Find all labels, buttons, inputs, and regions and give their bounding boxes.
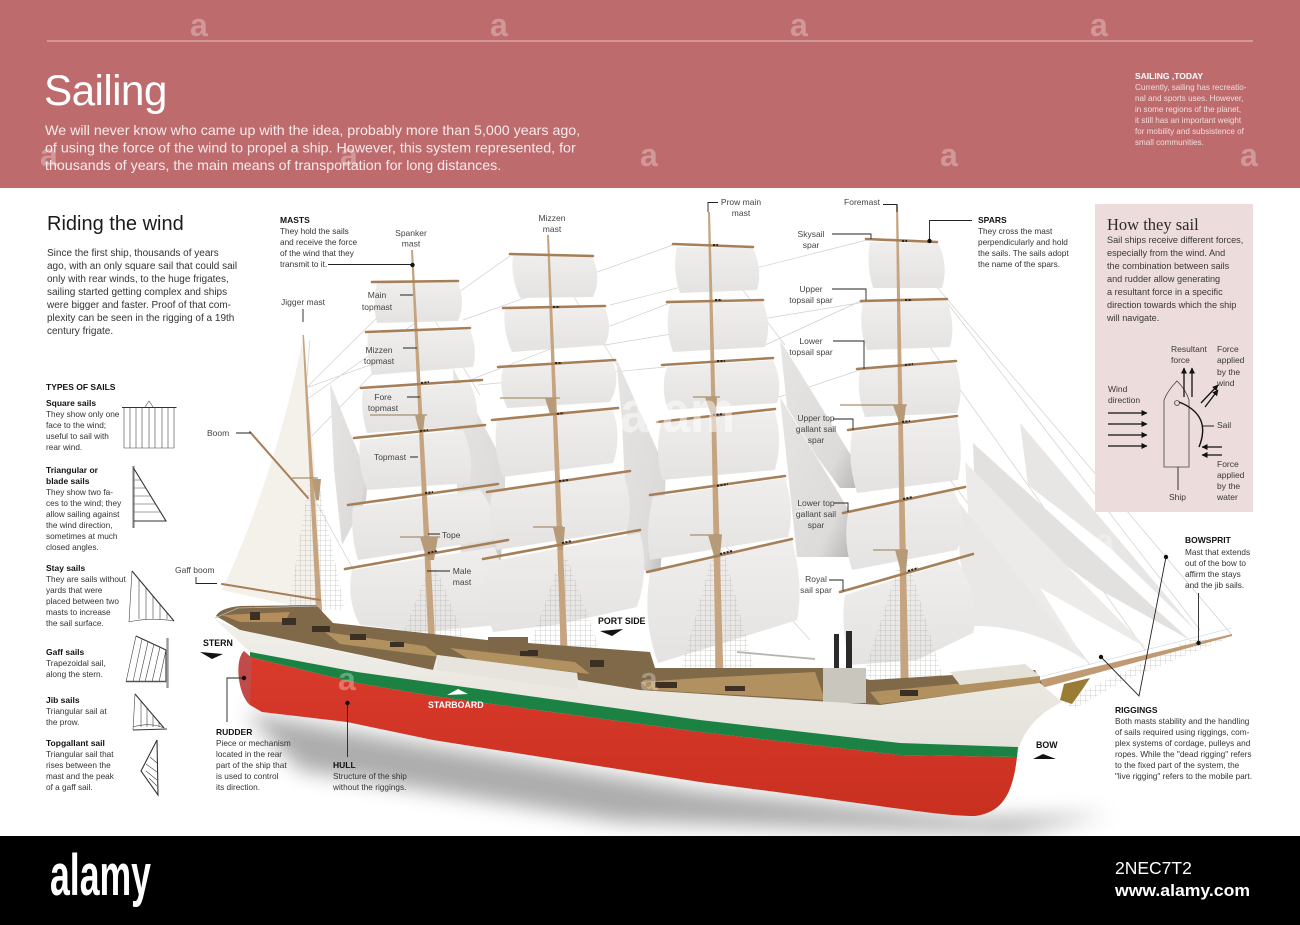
gaff sails [46, 636, 168, 688]
square sails: rear wind. [46, 443, 82, 452]
callout: riggings: RIGGINGS [1115, 705, 1158, 715]
triangular sails: blade sails [46, 476, 90, 486]
spar labels: Lower [799, 336, 823, 346]
hull shadow [245, 712, 1110, 834]
yards: spanker [345, 281, 508, 569]
staysails [330, 340, 860, 590]
direction label: port side: PORT SIDE [598, 616, 646, 626]
masts [302, 205, 909, 695]
image id and url: 2NEC7T2 [1115, 858, 1192, 878]
foremast sails [843, 242, 975, 665]
rigging lines [306, 240, 1232, 665]
stay sails: Stay sails [46, 563, 85, 573]
heading: riding the wind: Riding the wind [47, 213, 184, 235]
header band: a [940, 137, 958, 173]
direction label: bow: BOW [1036, 740, 1058, 750]
callout: bowsprit: Mast that extends [1185, 548, 1250, 557]
diagram: forces on a ship: Sail [1217, 420, 1231, 430]
topgallant sail: mast and the peak [46, 772, 115, 781]
mizzen mast sails [486, 255, 644, 632]
callout: rudder: located in the rear [216, 750, 282, 759]
triangular sails [46, 465, 166, 552]
mast labels: Jigger mast [281, 297, 326, 307]
mast labels: mast [453, 577, 472, 587]
topgallant sail [46, 738, 158, 795]
diagram: forces on a ship [1108, 344, 1245, 502]
header band: a [1090, 7, 1108, 43]
sidebar: sailing today: in some regions of the planet, [1135, 105, 1241, 114]
ghosted watermarks on ship: alam [620, 380, 735, 445]
stay sails: yards that were [46, 586, 103, 595]
gaff sails: along the stern. [46, 670, 103, 679]
text: riding the wind: century frigate. [47, 326, 113, 337]
text: how they sail: and rudder allow generating [1107, 274, 1220, 284]
image id and url: www.alamy.com [1114, 882, 1250, 900]
header band: a [190, 7, 208, 43]
triangular sails: ces to the wind; they [46, 499, 122, 508]
title: Sailing [44, 67, 167, 114]
callout: rudder: its direction. [216, 783, 260, 792]
ghosted watermarks on ship: a [640, 661, 658, 697]
mast labels: topmast [368, 403, 399, 413]
callout: spars: They cross the mast [978, 227, 1053, 236]
yards: prow main [647, 244, 792, 572]
spar labels: Royal [805, 574, 827, 584]
stay sails: placed between two [46, 597, 119, 606]
callout: riggings: plex systems of cordage, pulleys and [1115, 739, 1251, 748]
stay sails: They are sails without [46, 575, 126, 584]
callout: spars: the sails. The sails adopt [978, 249, 1069, 258]
spar labels: gallant sail [796, 424, 836, 434]
spar labels: topsail spar [789, 295, 833, 305]
spar labels: Skysail [798, 229, 825, 239]
header band: a [1240, 137, 1258, 173]
callout: hull [332, 701, 407, 792]
triangular sails: the wind direction, [46, 521, 112, 530]
diagram: forces on a ship: Resultant [1171, 344, 1208, 354]
callout: masts [280, 215, 415, 269]
spar labels: topsail spar [789, 347, 833, 357]
text: riding the wind: Since the first ship, thousands of years [47, 248, 219, 259]
text: riding the wind: were bigger and faster. Proof of that com- [46, 300, 231, 311]
yard fittings [420, 241, 918, 571]
rudder [238, 651, 252, 705]
callout: rudder [216, 676, 291, 792]
callout: bowsprit: and the jib sails. [1185, 581, 1244, 590]
triangular sails: closed angles. [46, 543, 99, 552]
diagram: forces on a ship: Ship [1169, 492, 1186, 502]
spar labels [789, 229, 871, 595]
callout: riggings: "live rigging" refers to the mobile part. [1115, 772, 1252, 781]
topgallant sail: of a gaff sail. [46, 783, 93, 792]
heading: how they sail: How they sail [1107, 215, 1199, 234]
gaff sails: Gaff sails [46, 647, 85, 657]
text: how they sail: especially from the wind. And [1107, 248, 1225, 258]
jib sails: Jib sails [46, 695, 80, 705]
sidebar: sailing today: it still has an important weight [1135, 116, 1242, 125]
stay sails [46, 563, 174, 628]
mast labels: Tope [442, 530, 461, 540]
text: how they sail: direction towards which the ship [1107, 300, 1236, 310]
callout: rudder: part of the ship that [216, 761, 287, 770]
text: how they sail: the combination between sails [1107, 261, 1230, 271]
callout: riggings: to the fixed part of the system, the [1115, 761, 1240, 770]
bowsprit [1040, 628, 1232, 708]
stay sails: masts to increase [46, 608, 111, 617]
yards: fore [840, 239, 973, 592]
square sails: face to the wind; [46, 421, 106, 430]
intro paragraph: thousands of years, the main means of transportation for long distances. [45, 158, 501, 174]
callout: bowsprit: affirm the stays [1185, 570, 1241, 579]
diagram: forces on a ship: wind [1216, 378, 1235, 388]
mast labels: Male [453, 566, 471, 576]
callout: spars: SPARS [978, 215, 1007, 225]
jigger gaff sail [222, 338, 322, 612]
text: riding the wind: sailing started getting complex and ships [47, 287, 227, 298]
mast labels: topmast [362, 302, 393, 312]
spar labels: spar [803, 240, 819, 250]
square sails: Square sails [46, 398, 96, 408]
deck boom [737, 652, 815, 659]
callout: masts: MASTS [280, 215, 310, 225]
square sails: useful to sail with [46, 432, 109, 441]
diagram: forces on a ship: applied [1217, 470, 1245, 480]
sidebar: sailing today: nal and sports uses. However, [1135, 94, 1243, 103]
sidebar: sailing today: Currently, sailing has recreatio- [1135, 83, 1247, 92]
callout: spars: perpendicularly and hold [978, 238, 1068, 247]
callout: hull: without the riggings. [332, 783, 406, 792]
callout: riggings: ropes. While the "dead rigging" refers [1115, 750, 1252, 759]
callout: bowsprit: BOWSPRIT [1185, 535, 1232, 545]
callout: bowsprit [1185, 535, 1250, 645]
text: how they sail: will navigate. [1106, 313, 1159, 323]
deck [215, 605, 1042, 708]
labels: boom and gaff boom: Gaff boom [175, 565, 215, 575]
image id and url [1114, 858, 1250, 900]
square sails [46, 398, 176, 452]
ghosted watermarks on ship: a [338, 661, 356, 697]
logo: alamy [50, 843, 151, 908]
ship illustration [215, 205, 1232, 834]
labels: boom and gaff boom: Boom [207, 428, 229, 438]
jib sails: Triangular sail at [46, 707, 107, 716]
callout: masts: and receive the force [280, 238, 357, 247]
text: riding the wind: only with rear winds, to the huge frigates, [47, 274, 229, 285]
callout: hull: HULL [333, 760, 356, 770]
callout: spars [927, 215, 1069, 269]
ghosted watermarks on ship: a [1096, 523, 1114, 559]
direction label: stern [200, 638, 233, 659]
gaff sails: Trapezoidal sail, [46, 659, 106, 668]
diagram: forces on a ship: by the [1217, 367, 1240, 377]
diagram: forces on a ship: applied [1217, 355, 1245, 365]
jib sails: the prow. [46, 718, 79, 727]
mast labels: Main [368, 290, 386, 300]
text: riding the wind: ago, with an only square sail that could sail [47, 261, 237, 272]
topgallant sail: Triangular sail that [46, 750, 114, 759]
mast labels: Mizzen [366, 345, 393, 355]
sidebar: sailing today: small communities. [1135, 138, 1204, 147]
topgallant sail: rises between the [46, 761, 111, 770]
text: how they sail: Sail ships receive different forces, [1107, 235, 1243, 245]
ghosted watermarks on ship: a [794, 491, 812, 527]
callout: rudder: Piece or mechanism [216, 739, 291, 748]
mast labels: Prow main [721, 197, 761, 207]
labels: boom and gaff boom [175, 428, 251, 584]
mast labels: Topmast [374, 452, 407, 462]
header band: a [340, 137, 358, 173]
mast labels: topmast [364, 356, 395, 366]
diagram: forces on a ship: by the [1217, 481, 1240, 491]
mast tops [292, 397, 908, 572]
prow main mast sails [647, 247, 800, 663]
mast labels: mast [732, 208, 751, 218]
heading: types of sails: TYPES OF SAILS [46, 382, 116, 392]
triangular sails: Triangular or [46, 465, 99, 475]
intro paragraph: We will never know who came up with the idea, probably more than 5,000 years ago, [45, 123, 580, 139]
ghosted watermarks on ship [338, 380, 1114, 697]
footer bar [0, 836, 1300, 925]
direction label: starboard: STARBOARD [428, 700, 484, 710]
panel: types of sails [46, 382, 176, 795]
spar labels: Lower top [797, 498, 835, 508]
shrouds [288, 480, 945, 685]
callout: riggings: Both masts stability and the handling [1115, 717, 1250, 726]
header band [0, 0, 1300, 188]
text: riding the wind: plexity can be seen in the rigging of a 19th [47, 313, 234, 324]
mast labels: Mizzen [539, 213, 566, 223]
header band: a [490, 7, 508, 43]
spar labels: spar [808, 520, 824, 530]
direction label: bow [1033, 740, 1058, 759]
diagram: forces on a ship: Force [1217, 344, 1239, 354]
diagram: forces on a ship: Wind [1108, 384, 1128, 394]
diagram: forces on a ship: force [1171, 355, 1190, 365]
jigger boom and gaff boom [222, 432, 320, 600]
hull [216, 620, 1062, 816]
mast labels: Fore [374, 392, 392, 402]
direction label: stern: STERN [203, 638, 233, 648]
funnels [834, 631, 852, 674]
callout: riggings: of sails required using riggings, com- [1115, 728, 1250, 737]
triangular sails: They show two fa- [46, 488, 113, 497]
mast labels: mast [543, 224, 562, 234]
mast labels: Spanker [395, 228, 427, 238]
text: how they sail: a resultant force in a specific [1107, 287, 1223, 297]
direction label: port side [598, 616, 646, 636]
square sails: They show only one [46, 410, 120, 419]
callout: hull: Structure of the ship [333, 772, 407, 781]
stay sails: the sail surface. [46, 619, 104, 628]
callout: masts: of the wind that they [280, 249, 355, 258]
mast labels: Foremast [844, 197, 881, 207]
callout: bowsprit: out of the bow to [1185, 559, 1246, 568]
header band: a [640, 137, 658, 173]
yards: mizzen [483, 254, 640, 559]
callout: rudder: RUDDER [216, 727, 252, 737]
mast labels: mast [402, 238, 421, 248]
sidebar: sailing today: SAILING ,TODAY [1135, 71, 1203, 81]
spar labels: gallant sail [796, 509, 836, 519]
intro paragraph: of using the force of the wind to propel a ship. However, this system represented, for [45, 140, 576, 156]
header band: a [40, 137, 58, 173]
spar labels: sail spar [800, 585, 832, 595]
direction label: starboard [428, 689, 484, 710]
diagram: forces on a ship: Force [1217, 459, 1239, 469]
triangular sails: allow sailing against [46, 510, 120, 519]
header band: a [790, 7, 808, 43]
spanker mast sails [350, 283, 504, 632]
spar labels: Upper top [797, 413, 835, 423]
triangular sails: sometimes at much [46, 532, 118, 541]
jib sails [46, 694, 167, 730]
callout: spars: the name of the spars. [978, 260, 1060, 269]
panel: how they sail [1095, 204, 1253, 512]
mast labels [281, 197, 897, 587]
spar labels: Upper [799, 284, 823, 294]
callout: masts: They hold the sails [280, 227, 349, 236]
spar labels: spar [808, 435, 824, 445]
diagram: forces on a ship: water [1216, 492, 1238, 502]
diagram: forces on a ship: direction [1108, 395, 1140, 405]
sidebar: sailing today [1135, 71, 1247, 147]
jib sails [957, 423, 1197, 660]
sidebar: sailing today: for mobility and subsistence of [1135, 127, 1245, 136]
callout: masts: transmit to it. [280, 260, 327, 269]
topgallant sail: Topgallant sail [46, 738, 105, 748]
callout: rudder: is used to control [216, 772, 279, 781]
callout: riggings [1099, 555, 1252, 781]
